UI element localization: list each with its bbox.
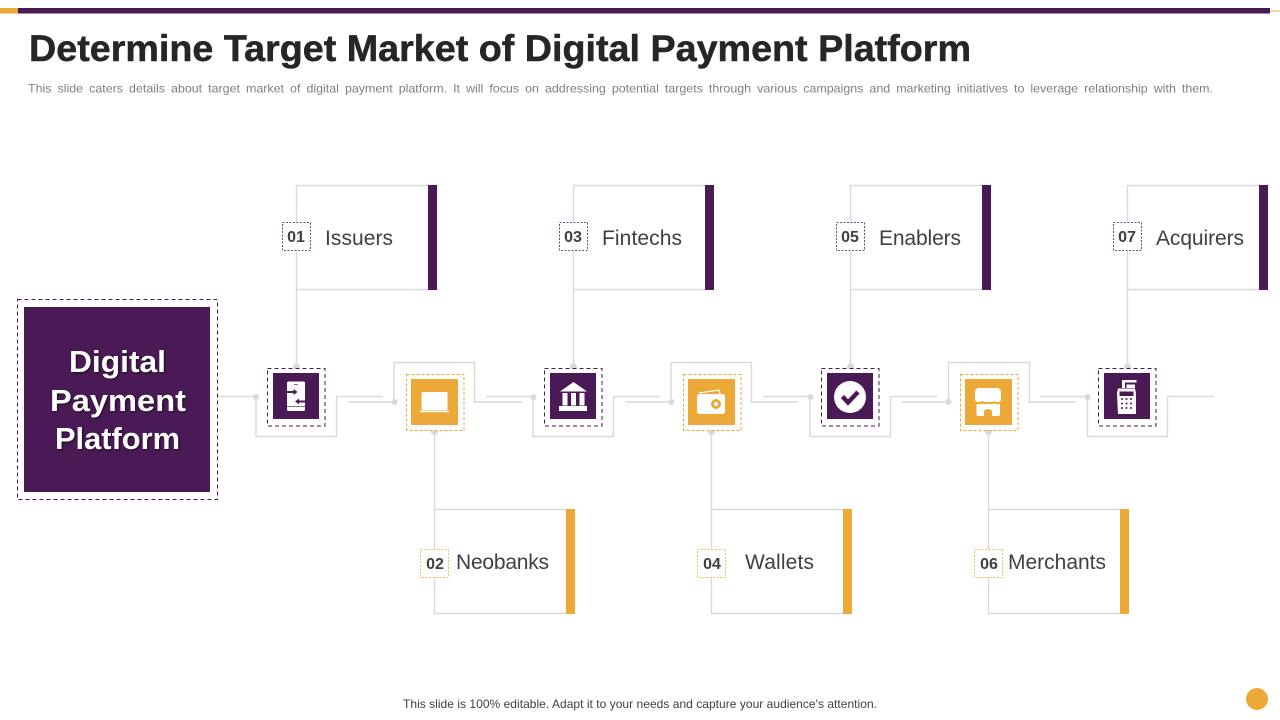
card: 01 Issuers xyxy=(282,185,437,367)
card: 06 Merchants xyxy=(974,431,1129,614)
card: 07 Acquirers xyxy=(1114,185,1268,367)
top accent bar xyxy=(0,8,1280,14)
card: 06 Merchants: Merchants xyxy=(1008,551,1106,574)
card: 03 Fintechs: Fintechs xyxy=(602,227,682,250)
connector lines xyxy=(218,362,1214,436)
card: 05 Enablers: Enablers xyxy=(879,227,961,250)
card: 01 Issuers: 01 xyxy=(287,229,305,246)
card: 07 Acquirers: 07 xyxy=(1118,229,1136,246)
card: 02 Neobanks: Neobanks xyxy=(456,551,549,574)
card: 03 Fintechs: 03 xyxy=(564,229,582,246)
icon: check mark xyxy=(822,368,879,426)
footer note: This slide is 100% editable. Adapt it to your needs and capture your audience's attention. xyxy=(403,697,877,711)
panel: central Digital Payment Platform box xyxy=(18,300,218,500)
orange corner dot xyxy=(1246,688,1268,710)
panel: central Digital Payment Platform box: Platform xyxy=(55,421,180,456)
icon: store xyxy=(960,374,1018,430)
title: Determine Target Market of Digital Payment Platform xyxy=(29,28,971,69)
icon: payment terminal xyxy=(1098,368,1156,426)
card: 05 Enablers: 05 xyxy=(841,229,859,246)
card: 06 Merchants: 06 xyxy=(980,556,998,573)
panel: central Digital Payment Platform box: Payment xyxy=(50,383,186,418)
card: 04 Wallets: Wallets xyxy=(745,551,814,574)
icon: wallet xyxy=(684,374,741,430)
panel: central Digital Payment Platform box: Digital xyxy=(69,344,166,379)
card: 02 Neobanks: 02 xyxy=(426,556,444,573)
card: 04 Wallets xyxy=(698,431,852,614)
card: 07 Acquirers: Acquirers xyxy=(1156,227,1244,250)
card: 05 Enablers xyxy=(836,185,991,367)
card: 04 Wallets: 04 xyxy=(703,556,721,573)
subtitle text: This slide caters details about target market of digital payment platform. It will focus on addressing potential targets through various campaigns and marketing initiatives to leverage relationship with them. xyxy=(28,82,1213,96)
card: 01 Issuers: Issuers xyxy=(325,227,393,250)
icon: laptop xyxy=(406,374,464,430)
card: 03 Fintechs xyxy=(560,185,714,367)
icon: mobile transfer xyxy=(268,368,325,426)
icon: bank xyxy=(544,368,602,426)
card: 02 Neobanks xyxy=(420,431,575,614)
